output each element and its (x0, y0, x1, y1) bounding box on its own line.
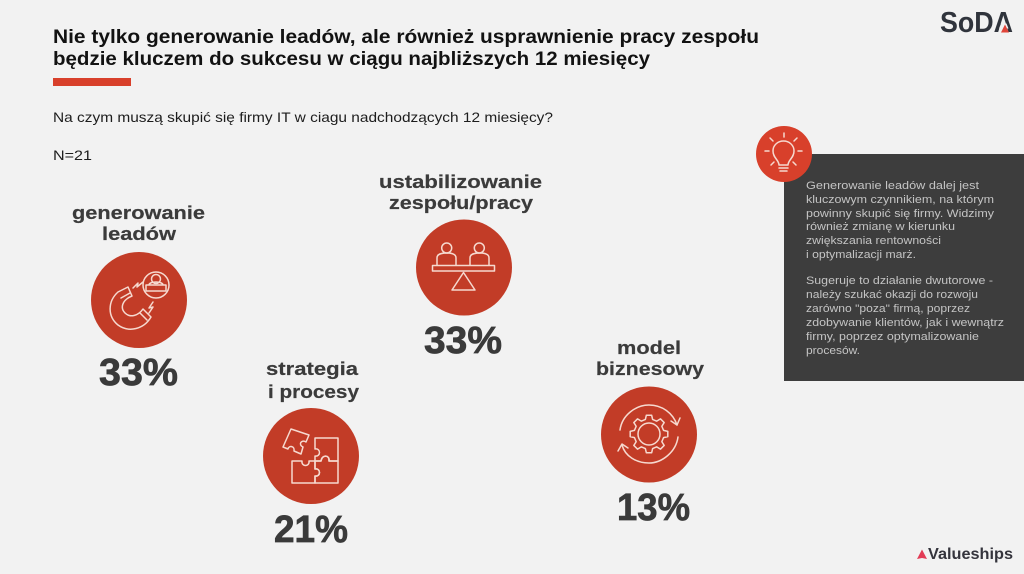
item: generowanie leadów (72, 202, 205, 394)
label (266, 358, 360, 402)
icon: gear with cycle arrows (601, 386, 697, 482)
title: Nie tylko generowanie leadów, ale również usprawnienie pracy zespołu (53, 26, 759, 48)
label: zespołu/pracy (389, 192, 534, 213)
label: biznesowy (596, 358, 705, 379)
title (53, 26, 759, 70)
commentary paragraph 2: zdobywanie klientów, jak i wewnątrz (806, 317, 1004, 329)
commentary paragraph 2: zarówno "poza" firmą, poprzez (806, 303, 970, 315)
item: ustabilizowanie zespołu/pracy (379, 171, 542, 362)
icon: people on a balance (416, 220, 512, 316)
logo: SoDA: SoDA (940, 7, 1013, 39)
label (72, 202, 205, 244)
commentary paragraph 1: zwiększania rentowności (806, 235, 941, 247)
commentary paragraph 1: powinny skupić się firmy. Widzimy (806, 208, 995, 220)
sample size: N=21 (53, 147, 92, 163)
commentary paragraph 1: i optymalizacji marż. (806, 249, 916, 261)
label: generowanie (72, 202, 205, 223)
label: ustabilizowanie (379, 171, 542, 192)
commentary paragraph 2: procesów. (806, 345, 860, 357)
icon: light bulb (756, 126, 812, 182)
value: 13% (617, 487, 690, 529)
label: strategia (266, 358, 359, 379)
item: strategia i procesy (263, 358, 360, 551)
commentary paragraph 2: Sugeruje to działanie dwutorowe - (806, 275, 993, 287)
label: i procesy (268, 381, 360, 402)
icon: puzzle pieces (263, 408, 359, 504)
commentary paragraph 1: również zmianę w kierunku (806, 221, 955, 233)
value: 33% (99, 352, 178, 394)
icon: magnet attracting a person (91, 252, 187, 348)
question subtitle: Na czym muszą skupić się firmy IT w ciagu nadchodzących 12 miesięcy? (53, 109, 553, 125)
commentary paragraph 1: kluczowym czynnikiem, na którym (806, 194, 994, 206)
commentary paragraph 2 (806, 275, 1004, 357)
label: model (617, 337, 681, 358)
value: 33% (424, 320, 502, 362)
commentary paragraph 1 (806, 180, 995, 261)
panel: commentary (784, 154, 1024, 381)
logo: Valueships: Valueships (928, 546, 1013, 563)
commentary paragraph 2: firmy, poprzez optymalizowanie (806, 331, 979, 343)
item: model biznesowy (596, 337, 705, 529)
commentary paragraph 1: Generowanie leadów dalej jest (806, 180, 979, 192)
title: będzie kluczem do sukcesu w ciągu najbliższych 12 miesięcy (53, 48, 650, 70)
label (596, 337, 705, 379)
label: leadów (102, 223, 177, 244)
commentary paragraph 2: należy szukać okazji do rozwoju (806, 289, 978, 301)
value: 21% (274, 509, 348, 551)
label (379, 171, 542, 213)
title accent bar (53, 78, 131, 86)
